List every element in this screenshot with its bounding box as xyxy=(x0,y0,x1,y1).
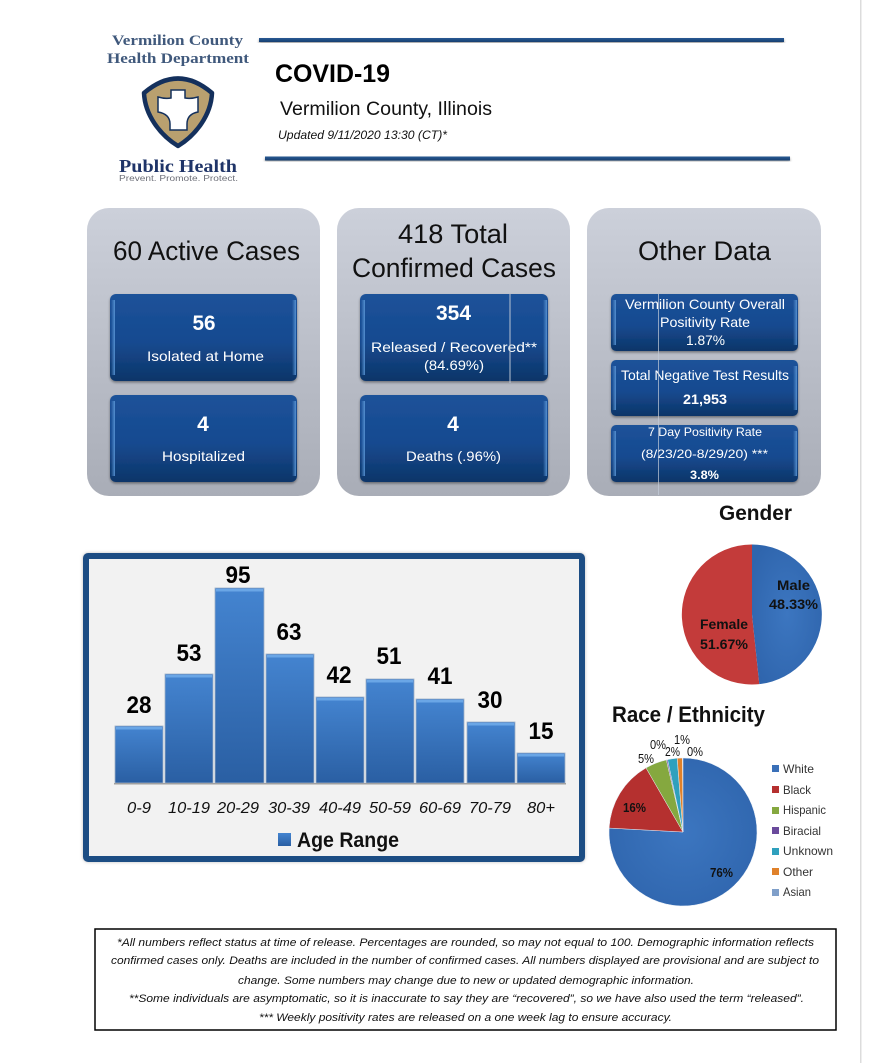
header rule bottom xyxy=(265,156,790,160)
chart: gender pie xyxy=(682,502,822,684)
logo: Vermilion County Health Department xyxy=(107,33,249,183)
panel background xyxy=(87,208,320,496)
x axis labels: 80+ xyxy=(527,800,555,817)
header rule top xyxy=(259,38,784,42)
axis baseline xyxy=(114,783,566,784)
x axis labels: 60-69 xyxy=(419,800,461,817)
panel heading: 60 Active Cases xyxy=(113,236,300,266)
card: deaths: Deaths (.96%) xyxy=(406,448,501,464)
card: released / recovered: 354 xyxy=(436,302,471,325)
logo heading: Vermilion County xyxy=(112,33,244,49)
gender heading: Gender xyxy=(719,502,792,525)
pie legend: Asian xyxy=(783,885,811,899)
x axis labels: 70-79 xyxy=(469,800,511,817)
card: overall positivity rate xyxy=(611,294,798,351)
logo heading xyxy=(107,33,249,67)
card: deaths: 4 xyxy=(447,413,459,436)
card: 7 day positivity rate xyxy=(611,425,798,482)
card: released / recovered: (84.69%) xyxy=(424,357,484,373)
bar values: 28 xyxy=(126,692,152,719)
card: hospitalized: Hospitalized xyxy=(162,448,245,464)
update date: Updated 9/11/2020 13:30 (CT)* xyxy=(278,128,447,142)
card: deaths xyxy=(360,395,548,482)
logo wordmark: Public Health xyxy=(119,156,237,176)
card: released / recovered xyxy=(360,294,548,383)
footnote text: *** Weekly positivity rates are released on a one week lag to ensure accuracy. xyxy=(259,1012,672,1024)
bar values: 95 xyxy=(226,562,250,589)
pie legend: Unknown xyxy=(783,844,833,858)
page edge line xyxy=(860,0,862,1063)
bar values: 30 xyxy=(478,687,502,714)
card: 7 day positivity rate: 3.8% xyxy=(690,468,719,482)
pie legend: Black xyxy=(783,783,812,797)
card: overall positivity rate: Positivity Rate xyxy=(660,314,750,330)
card: isolated at home xyxy=(110,294,297,381)
pie legend: Biracial xyxy=(783,824,821,838)
panel background xyxy=(587,208,821,496)
footnote text: **Some individuals are asymptomatic, so it is inaccurate to say they are “recovered”, so we have also used the term “released”. xyxy=(129,993,804,1005)
chart legend: Age Range xyxy=(297,829,399,852)
pie labels: 2% xyxy=(665,745,680,759)
bar top highlights xyxy=(116,589,564,756)
male label: Male xyxy=(777,578,811,593)
female label: Female xyxy=(700,617,749,632)
panel background xyxy=(337,208,570,496)
title: COVID-19 xyxy=(275,60,390,88)
panel: total confirmed cases xyxy=(337,208,570,496)
pie labels: 1% xyxy=(674,733,690,747)
icon: shield with cross xyxy=(144,78,212,146)
pie labels: 16% xyxy=(623,801,646,815)
panel heading xyxy=(352,219,556,283)
pie legend: Other xyxy=(783,865,813,879)
card: overall positivity rate: Vermilion County Overall xyxy=(625,296,785,312)
bar values: 51 xyxy=(376,643,402,670)
card: total negative test results: 21,953 xyxy=(683,391,727,407)
footnote text: *All numbers reflect status at time of release. Percentages are rounded, so may not equal to 100. Demographic information reflects xyxy=(117,937,815,949)
subtitle: Vermilion County, Illinois xyxy=(280,99,492,120)
pie labels: 76% xyxy=(710,866,733,880)
x axis labels: 30-39 xyxy=(268,800,310,817)
bar values: 63 xyxy=(276,619,302,646)
card: isolated at home: Isolated at Home xyxy=(147,348,264,364)
pie legend: Hispanic xyxy=(783,803,826,817)
card: isolated at home: 56 xyxy=(192,312,216,335)
x axis labels: 10-19 xyxy=(168,800,210,817)
card: overall positivity rate: 1.87% xyxy=(686,332,725,348)
panel heading: Confirmed Cases xyxy=(352,253,556,283)
pie labels: 5% xyxy=(638,752,654,766)
footnotes xyxy=(95,929,836,1030)
pie labels xyxy=(623,733,733,880)
panel heading: 418 Total xyxy=(398,219,508,249)
male slice xyxy=(752,544,822,684)
card: hospitalized: 4 xyxy=(197,413,209,436)
pie labels: 0% xyxy=(650,738,666,752)
panel: other data xyxy=(587,208,821,496)
logo heading: Health Department xyxy=(107,51,249,67)
pie legend xyxy=(772,762,833,899)
chart frame xyxy=(86,556,582,859)
panel heading: Other Data xyxy=(638,236,772,266)
pie labels: 0% xyxy=(687,745,703,759)
chart: race / ethnicity pie xyxy=(609,702,833,906)
x axis labels: 0-9 xyxy=(127,800,151,817)
card: 7 day positivity rate: 7 Day Positivity Rate xyxy=(648,425,762,439)
footnote text: change. Some numbers may change due to new or updated demographic information. xyxy=(238,975,694,987)
bar values: 53 xyxy=(176,640,202,667)
bar values: 42 xyxy=(326,662,352,689)
x axis labels: 20-29 xyxy=(216,800,259,817)
pie slices xyxy=(609,758,757,906)
race heading: Race / Ethnicity xyxy=(612,702,766,727)
footnote box xyxy=(95,929,836,1030)
x axis labels: 50-59 xyxy=(369,800,411,817)
bar values: 15 xyxy=(528,718,554,745)
bars xyxy=(115,588,565,783)
x axis labels xyxy=(127,800,555,817)
logo tagline: Prevent. Promote. Protect. xyxy=(119,174,238,183)
footnote text: confirmed cases only. Deaths are included in the number of confirmed cases. All numbers displayed are provisional and are subject to xyxy=(111,955,819,967)
bar values: 41 xyxy=(428,663,452,690)
female label: 51.67% xyxy=(700,637,748,652)
card: released / recovered: Released / Recovered** xyxy=(371,339,538,355)
card: total negative test results: Total Negative Test Results xyxy=(621,367,789,383)
bar values xyxy=(126,562,554,745)
card: total negative test results xyxy=(611,360,798,416)
female label xyxy=(700,617,749,652)
footnote text xyxy=(111,937,819,1024)
pie legend: White xyxy=(783,762,814,776)
panel: active cases xyxy=(87,208,320,496)
chart: age range bars xyxy=(86,556,582,859)
male label: 48.33% xyxy=(769,597,818,612)
card: hospitalized xyxy=(110,395,297,482)
x axis labels: 40-49 xyxy=(319,800,361,817)
female slice xyxy=(682,544,759,684)
card: 7 day positivity rate: (8/23/20-8/29/20) *** xyxy=(641,447,768,461)
male label xyxy=(769,578,818,612)
